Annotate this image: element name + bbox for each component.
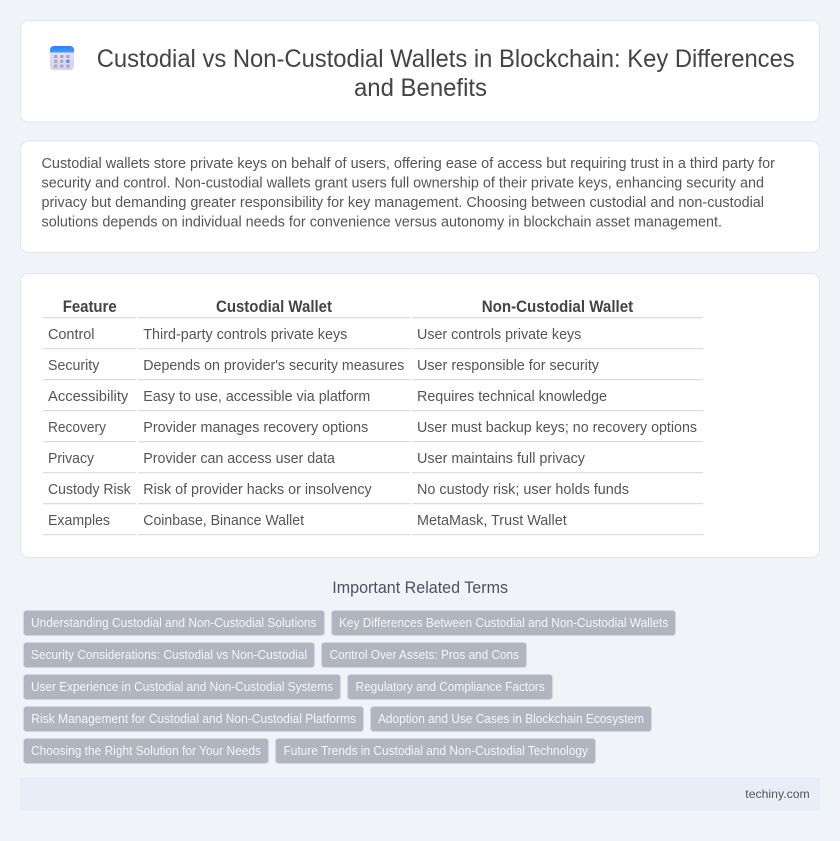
table row: privacy: User maintains full privacy <box>417 451 586 467</box>
tag <box>24 642 314 668</box>
title: Custodial vs Non-Custodial Wallets in Blockchain: Key Differences <box>97 46 795 73</box>
table row: recovery: User must backup keys; no recovery options <box>417 420 697 436</box>
intro paragraph: Custodial wallets store private keys on behalf of users, offering ease of access but requiring trust in a third party for <box>42 155 775 172</box>
intro paragraph: security and control. Non-custodial wallets grant users full ownership of their private keys, enhancing security and <box>42 175 764 192</box>
table row: privacy: Provider can access user data <box>143 451 336 467</box>
table row: custody risk <box>43 482 703 504</box>
intro paragraph <box>42 155 775 231</box>
table row: control: Third-party controls private keys <box>143 327 347 343</box>
tag <box>24 674 340 700</box>
tag <box>348 674 552 700</box>
panel: title header <box>20 20 820 122</box>
tag <box>332 610 676 636</box>
table row: accessibility: Accessibility <box>48 389 129 405</box>
footer bar <box>20 777 820 811</box>
table row: control <box>43 327 703 349</box>
panel: related term tags <box>24 610 676 764</box>
intro paragraph: solutions depends on individual needs for convenience versus autonomy in blockchain asset management. <box>42 214 722 231</box>
footer source text: techiny.com <box>745 787 810 801</box>
tag: Understanding Custodial and Non-Custodial Solutions <box>31 616 316 630</box>
table row: security: Security <box>48 358 100 374</box>
table row: security: User responsible for security <box>417 358 600 374</box>
table row: control: User controls private keys <box>417 327 581 343</box>
panel: introduction <box>20 141 820 252</box>
tag <box>276 738 596 764</box>
table row: control: Control <box>48 327 94 343</box>
tag: Security Considerations: Custodial vs Non-Custodial <box>31 648 307 662</box>
heading: important related terms: Important Related Terms <box>332 579 508 597</box>
intro paragraph: privacy but demanding greater responsibility for key management. Choosing between custodial and non-custodial <box>42 194 764 211</box>
table row: examples: Coinbase, Binance Wallet <box>143 513 304 529</box>
table row: privacy: Privacy <box>48 451 95 467</box>
table row: recovery: Provider manages recovery options <box>143 420 368 436</box>
tag: User Experience in Custodial and Non-Custodial Systems <box>31 680 333 694</box>
table row: custody risk: No custody risk; user holds funds <box>417 482 629 498</box>
title <box>97 46 795 102</box>
title: and Benefits <box>354 75 487 102</box>
table row: examples: MetaMask, Trust Wallet <box>417 513 567 529</box>
table row: recovery <box>43 420 703 442</box>
tag <box>24 706 364 732</box>
tag: Choosing the Right Solution for Your Needs <box>31 744 261 758</box>
tag: Control Over Assets: Pros and Cons <box>330 648 519 662</box>
table header row: Custodial Wallet <box>216 298 332 316</box>
tag <box>322 642 526 668</box>
table row: accessibility: Easy to use, accessible via platform <box>143 389 370 405</box>
tag: Adoption and Use Cases in Blockchain Ecosystem <box>378 712 644 726</box>
tag: Regulatory and Compliance Factors <box>356 680 545 694</box>
table header row: Feature <box>63 298 117 316</box>
table row: accessibility <box>43 389 703 411</box>
tag <box>370 706 652 732</box>
table row: privacy <box>43 451 703 473</box>
table row: accessibility: Requires technical knowledge <box>417 389 607 405</box>
table header row: Non-Custodial Wallet <box>482 298 634 316</box>
table row: examples <box>43 513 703 535</box>
table header row <box>43 298 703 318</box>
table row: security: Depends on provider's security measures <box>143 358 404 374</box>
table row: security <box>43 358 703 380</box>
tag <box>24 610 324 636</box>
icon: calendar grid <box>50 46 74 70</box>
table row: custody risk: Custody Risk <box>48 482 131 498</box>
tag <box>24 738 268 764</box>
tag: Key Differences Between Custodial and Non-Custodial Wallets <box>339 616 668 630</box>
table row: examples: Examples <box>48 513 110 529</box>
table row: recovery: Recovery <box>48 420 107 436</box>
tag: Risk Management for Custodial and Non-Custodial Platforms <box>31 712 356 726</box>
table row: custody risk: Risk of provider hacks or insolvency <box>143 482 372 498</box>
panel: comparison table <box>20 274 820 558</box>
tag: Future Trends in Custodial and Non-Custodial Technology <box>284 744 589 758</box>
